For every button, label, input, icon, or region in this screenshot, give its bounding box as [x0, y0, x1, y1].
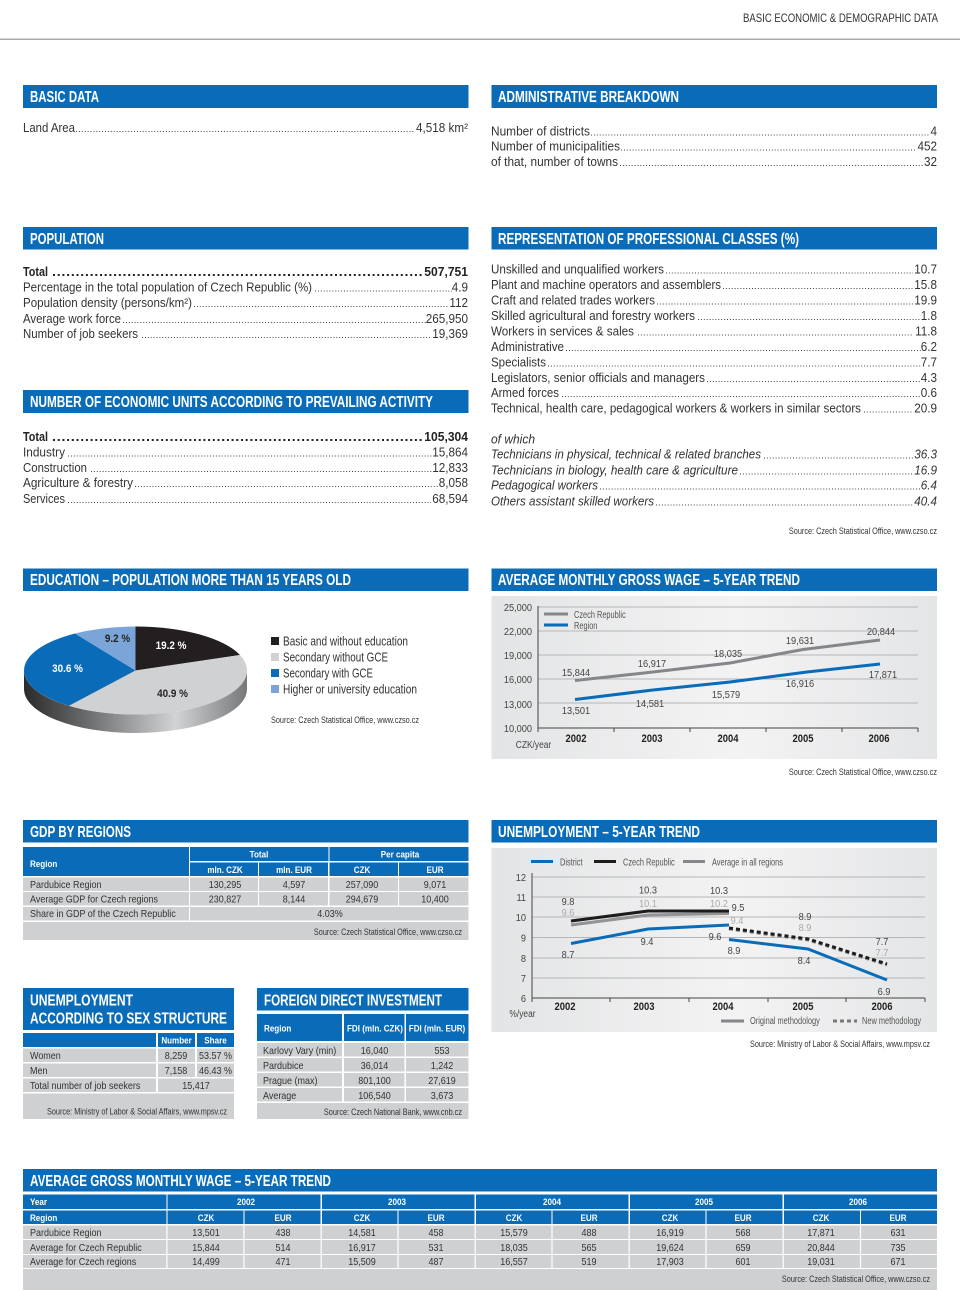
line chart: unemployment: 2002: [555, 1001, 576, 1013]
text block: of which: Pedagogical workers: [491, 478, 598, 492]
table rows: 19,624: [656, 1243, 684, 1254]
table rows: 601: [735, 1257, 751, 1268]
table header: currency: EUR: [428, 1212, 445, 1223]
panel: basic data: Land Area: [23, 120, 76, 135]
panel: foreign direct investment: [257, 988, 468, 1119]
table: fdi: Prague (max): [263, 1076, 317, 1087]
table header: years: [23, 1194, 937, 1209]
line chart: wages: CZK/year: [516, 739, 551, 751]
table header: currency: EUR: [735, 1212, 752, 1223]
panel: economic units: NUMBER OF ECONOMIC UNITS ACCORDING TO PREVAILING ACTIVITY: [30, 394, 433, 411]
table: fdi: Average: [263, 1091, 296, 1102]
table: gdp: 8,144: [283, 894, 305, 906]
table: gdp: 230,827: [209, 894, 241, 906]
line chart: unemployment: %/year: [509, 1008, 536, 1020]
panel: population: 112: [449, 295, 468, 310]
panel: professional classes: Workers in services & sales: [491, 324, 634, 338]
table: gdp: [23, 847, 468, 940]
line chart: unemployment: 2006: [872, 1001, 893, 1013]
panel: professional classes: REPRESENTATION OF PROFESSIONAL CLASSES (%): [498, 231, 799, 248]
table rows: 17,903: [656, 1257, 684, 1268]
panel: administrative breakdown: 4: [931, 124, 937, 139]
table header: currency: [23, 1210, 937, 1224]
panel: professional classes: Administrative: [491, 339, 564, 354]
line chart: wages: 18,035: [714, 649, 743, 660]
table rows: 15,844: [192, 1243, 220, 1254]
panel: unemployment trend: UNEMPLOYMENT – 5-YEAR TREND: [498, 824, 700, 841]
table rows: 568: [735, 1228, 751, 1239]
table rows: 438: [275, 1228, 291, 1239]
table header: currency: EUR: [890, 1212, 907, 1223]
table: fdi: 106,540: [358, 1091, 391, 1102]
table: fdi: Pardubice: [263, 1061, 303, 1072]
table rows: 565: [581, 1243, 597, 1254]
text block: of which: 40.4: [914, 494, 937, 509]
table rows: Average for Czech regions: [30, 1257, 136, 1268]
table: sex structure: 15,417: [182, 1081, 210, 1092]
line chart: wages: 10,000: [504, 724, 533, 735]
panel: professional classes: 19.9: [914, 293, 937, 308]
table: fdi: 3,673: [431, 1091, 453, 1102]
table rows: 15,509: [348, 1257, 376, 1268]
line chart: wages: 13,000: [504, 700, 533, 711]
pie chart: [24, 626, 247, 733]
line chart: wages: 2006: [869, 733, 890, 745]
table rows: 531: [428, 1243, 444, 1254]
line chart: unemployment: 9.6: [709, 932, 722, 943]
table: gdp: 257,090: [346, 880, 378, 891]
table: sex structure: Men: [30, 1066, 47, 1077]
line chart: unemployment: 9.6: [562, 908, 575, 919]
panel: average gross monthly wage table: [23, 1169, 937, 1290]
table rows: 514: [275, 1243, 291, 1254]
line chart: unemployment: 9.4: [731, 916, 744, 927]
line chart: unemployment: 9.5: [732, 903, 745, 914]
source note: Source: Czech Statistical Office, www.czso.cz: [271, 714, 419, 725]
line chart: unemployment: 11: [516, 893, 527, 904]
panel: professional classes: 6.2: [921, 339, 937, 354]
panel: unemployment by sex: UNEMPLOYMENT: [30, 992, 133, 1010]
line chart: unemployment: 10: [516, 913, 527, 924]
line chart: wages: 14,581: [636, 699, 665, 710]
line chart: unemployment: 7: [521, 974, 526, 985]
table: sex structure: 7,158: [165, 1066, 187, 1077]
panel: population: 265,950: [426, 311, 468, 326]
table: gdp: Region: [30, 858, 57, 869]
line chart: wages: 2003: [642, 733, 663, 745]
table: gdp: Pardubice Region: [30, 880, 101, 891]
panel: wage trend: AVERAGE MONTHLY GROSS WAGE – 5-YEAR TREND: [498, 572, 800, 589]
line chart: unemployment: 7.7: [876, 937, 888, 948]
line chart: wages: 19,631: [786, 636, 815, 647]
panel: professional classes: Specialists: [491, 354, 546, 370]
panel: economic units: 68,594: [432, 491, 468, 506]
line chart: wages: 22,000: [504, 627, 533, 638]
line chart: unemployment: Average in all regions: [712, 856, 783, 868]
pie legend: Secondary without GCE: [283, 650, 388, 664]
table header: currency: CZK: [354, 1212, 371, 1223]
table: sex structure: 53.57 %: [199, 1051, 233, 1062]
panel: professional classes: 10.7: [914, 262, 937, 277]
table rows: 17,871: [807, 1228, 835, 1239]
line chart: unemployment: 2004: [713, 1001, 734, 1013]
line chart: unemployment: District: [560, 856, 583, 868]
table: fdi: Source: Czech National Bank, www.cnb.cz: [324, 1106, 462, 1117]
panel: administrative breakdown: Number of districts: [491, 124, 590, 138]
source note: Source: Ministry of Labor & Social Affairs, www.mpsv.cz: [750, 1038, 930, 1049]
text block: of which: of which: [491, 432, 535, 446]
panel: professional classes: Technical, health care, pedagogical workers & workers in similar sectors: [491, 400, 861, 416]
table: fdi: 553: [434, 1046, 450, 1057]
panel: foreign direct investment: FOREIGN DIRECT INVESTMENT: [264, 992, 442, 1010]
table: gdp: 10,400: [421, 894, 449, 906]
line chart: unemployment: Original methodology: [750, 1015, 820, 1026]
table rows: 735: [890, 1243, 906, 1254]
line chart: unemployment: 7.7: [876, 948, 888, 959]
table: gdp: 9,071: [424, 880, 446, 891]
line chart: wages: 2004: [718, 733, 739, 745]
table header: currency: EUR: [581, 1212, 598, 1223]
table: fdi: Region: [264, 1023, 291, 1034]
panel: professional classes: 15.8: [914, 277, 937, 292]
panel: administrative breakdown: 452: [918, 139, 937, 154]
panel: professional classes: Unskilled and unqualified workers: [491, 262, 664, 276]
line chart: unemployment: 9.4: [641, 937, 654, 948]
table rows: 671: [890, 1257, 906, 1268]
table rows: 471: [275, 1257, 291, 1268]
panel: economic units: 12,833: [432, 460, 468, 475]
line chart: unemployment: 2003: [634, 1001, 655, 1013]
table rows: 16,557: [500, 1257, 528, 1268]
table header: years: 2006: [849, 1196, 867, 1207]
line chart: wages: 16,000: [504, 675, 533, 686]
panel: administrative breakdown: 32: [924, 154, 937, 169]
table: fdi: 16,040: [361, 1046, 388, 1057]
table: sex structure: Number: [161, 1035, 192, 1046]
table: gdp: CZK: [354, 864, 371, 875]
line chart: unemployment: 10.3: [639, 885, 657, 897]
panel: economic units: [23, 390, 468, 506]
table rows: Pardubice Region: [30, 1228, 101, 1239]
panel: education: [23, 568, 468, 733]
table rows: 19,031: [807, 1257, 835, 1268]
line chart: unemployment: 8: [521, 954, 527, 965]
panel: gdp by regions: [23, 820, 468, 940]
panel: professional classes: 0.6: [921, 385, 937, 400]
table: gdp: mln. EUR: [276, 864, 313, 875]
panel: professional classes: Legislators, senior officials and managers: [491, 370, 705, 385]
panel: professional classes: 7.7: [921, 355, 937, 370]
table header: currency: Region: [30, 1212, 57, 1223]
panel: population: [23, 227, 468, 341]
panel: administrative breakdown: ADMINISTRATIVE BREAKDOWN: [498, 89, 679, 106]
table: fdi: [257, 1014, 468, 1119]
line chart: wages: 2002: [566, 733, 587, 745]
line chart: wages: Czech Republic: [574, 609, 626, 620]
table rows: 488: [581, 1228, 597, 1239]
table: fdi: 1,242: [431, 1061, 453, 1072]
table rows: Average for Czech Republic: [30, 1243, 142, 1254]
panel: economic units: Agriculture & forestry: [23, 475, 133, 490]
table: gdp: Per capita: [381, 849, 419, 860]
panel: professional classes: Plant and machine operators and assemblers: [491, 277, 721, 292]
panel: professional classes: Skilled agricultural and forestry workers: [491, 308, 695, 323]
pie chart: 19.2 %: [156, 641, 187, 652]
table: gdp: Share in GDP of the Czech Republic: [30, 909, 176, 920]
line chart: unemployment: 2005: [793, 1001, 814, 1013]
panel: economic units: Industry: [23, 444, 65, 460]
line chart: unemployment: 9: [521, 933, 527, 945]
table rows: 458: [428, 1228, 444, 1239]
line chart: wages: 15,844: [562, 668, 591, 679]
text block: of which: Others assistant skilled workers: [491, 494, 654, 508]
panel: basic data: 4,518 km²: [416, 120, 468, 135]
table rows: 16,919: [656, 1228, 684, 1239]
line chart: wages: 25,000: [504, 603, 533, 614]
table header: years: 2003: [388, 1196, 406, 1207]
panel: administrative breakdown: [491, 85, 937, 169]
panel: population: Total: [23, 264, 48, 279]
table rows: 14,581: [348, 1228, 376, 1239]
line chart: unemployment: New methodology: [862, 1015, 922, 1026]
pie legend: Secondary with GCE: [283, 666, 373, 680]
table header: currency: CZK: [506, 1212, 523, 1223]
table rows: 16,917: [348, 1243, 376, 1254]
line chart: wages: 16,916: [786, 679, 815, 690]
table header: currency: CZK: [198, 1212, 215, 1223]
panel: unemployment trend: [492, 820, 937, 1049]
line chart: unemployment: 12: [516, 873, 526, 884]
table: sex structure: Women: [30, 1051, 61, 1062]
table rows: 18,035: [500, 1243, 528, 1254]
table rows: 631: [890, 1228, 906, 1239]
line chart: wages: 20,844: [867, 627, 896, 638]
line chart: unemployment: 8.9: [799, 923, 812, 934]
line chart: unemployment: 6.9: [878, 987, 891, 998]
pie legend: [271, 634, 417, 696]
panel: average gross monthly wage table: AVERAGE GROSS MONTHLY WAGE – 5-YEAR TREND: [30, 1173, 331, 1190]
line chart: unemployment: 8.4: [798, 956, 811, 967]
line chart: unemployment: 10.2: [710, 899, 728, 910]
text block: of which: Technicians in physical, technical & related branches: [491, 446, 761, 462]
text block: of which: 16.9: [914, 463, 937, 478]
text block: of which: 36.3: [914, 447, 937, 462]
line chart: wages: 2005: [793, 733, 814, 745]
table rows: 659: [735, 1243, 751, 1254]
panel: economic units: Construction: [23, 460, 87, 475]
panel: economic units: 15,864: [432, 445, 468, 460]
line chart: wages: Region: [574, 620, 598, 631]
table: fdi: 27,619: [428, 1076, 456, 1087]
table rows: [23, 1225, 937, 1290]
line chart: wages: 15,579: [712, 690, 741, 701]
panel: education: EDUCATION – POPULATION MORE THAN 15 YEARS OLD: [30, 572, 351, 589]
table rows: 14,499: [192, 1257, 220, 1268]
pie legend: Basic and without education: [283, 634, 408, 648]
table: gdp: 294,679: [346, 894, 378, 906]
panel: professional classes: 20.9: [914, 401, 937, 416]
panel: professional classes: 4.3: [921, 370, 937, 385]
panel: professional classes: Armed forces: [491, 385, 559, 400]
text block: of which: Technicians in biology, health care & agriculture: [491, 462, 738, 478]
panel: administrative breakdown: of that, number of towns: [491, 154, 618, 169]
table: sex structure: Source: Ministry of Labor & Social Affairs, www.mpsv.cz: [47, 1106, 227, 1117]
pie chart: 40.9 %: [157, 689, 189, 700]
line chart: unemployment: 9.8: [562, 897, 575, 908]
source note: Source: Czech Statistical Office, www.czso.cz: [789, 766, 937, 777]
panel: economic units: Total: [23, 429, 48, 444]
line chart: wages: 13,501: [562, 706, 591, 717]
table: gdp: Source: Czech Statistical Office, www.czso.cz: [314, 926, 462, 937]
panel: unemployment by sex: ACCORDING TO SEX STRUCTURE: [30, 1010, 227, 1028]
table rows: 13,501: [192, 1228, 220, 1239]
line chart: unemployment: 8.7: [562, 950, 574, 961]
panel: basic data: BASIC DATA: [30, 89, 99, 106]
line chart: unemployment: 6: [521, 994, 527, 1005]
table: fdi: 36,014: [361, 1061, 388, 1072]
line chart: wages: 17,871: [869, 670, 898, 681]
table header: years: Year: [30, 1196, 48, 1207]
line chart: wages: 16,917: [638, 659, 666, 670]
panel: population: Percentage in the total population of Czech Republic (%): [23, 280, 312, 294]
pie chart: 30.6 %: [52, 664, 84, 675]
table: fdi: FDI (mln. EUR): [409, 1023, 465, 1034]
panel: administrative breakdown: Number of municipalities: [491, 138, 620, 154]
line chart: unemployment: [492, 848, 937, 1032]
source note: Source: Czech Statistical Office, www.czso.cz: [789, 525, 937, 536]
table: sex structure: [23, 1033, 234, 1119]
table: gdp: Total: [250, 849, 268, 860]
table rows: Source: Czech Statistical Office, www.czso.cz: [782, 1273, 930, 1284]
panel: economic units: 105,304: [424, 430, 468, 444]
panel: economic units: Services: [23, 491, 65, 506]
table: gdp: 130,295: [209, 880, 241, 891]
panel: economic units: 8,058: [439, 475, 468, 490]
line chart: unemployment: 10.3: [710, 886, 728, 897]
table header: years: 2004: [543, 1196, 561, 1207]
table rows: 487: [428, 1257, 444, 1268]
table: sex structure: Total number of job seekers: [30, 1081, 141, 1092]
line chart: unemployment: Czech Republic: [623, 856, 675, 868]
panel: professional classes: 1.8: [921, 308, 937, 323]
pie chart: 9.2 %: [105, 634, 131, 645]
table header: years: 2002: [237, 1196, 255, 1207]
table header: currency: CZK: [813, 1212, 830, 1223]
panel: population: POPULATION: [30, 231, 104, 248]
table: sex structure: Share: [204, 1035, 227, 1046]
panel: population: Population density (persons/km²): [23, 295, 192, 310]
table: sex structure: 46.43 %: [199, 1066, 233, 1077]
table: gdp: 4.03%: [317, 909, 343, 920]
table: fdi: FDI (mln. CZK): [347, 1023, 403, 1034]
panel: population: 4.9: [452, 280, 468, 295]
table: fdi: 801,100: [358, 1076, 391, 1087]
table: gdp: mln. CZK: [207, 864, 243, 875]
panel: professional classes: [491, 227, 937, 416]
table header: years: 2005: [695, 1196, 713, 1207]
table: fdi: Karlovy Vary (min): [263, 1046, 336, 1057]
table rows: 519: [581, 1257, 597, 1268]
table: gdp: EUR: [427, 864, 444, 875]
panel: unemployment by sex: [23, 988, 234, 1119]
panel: professional classes: Craft and related trades workers: [491, 292, 655, 308]
panel: population: 19,369: [432, 326, 468, 341]
line chart: wages: [492, 596, 937, 759]
text block: of which: 6.4: [921, 478, 937, 493]
table header: currency: CZK: [662, 1212, 679, 1223]
table: gdp: 4,597: [283, 880, 305, 891]
line chart: unemployment: 8.9: [728, 946, 741, 957]
panel: gdp by regions: GDP BY REGIONS: [30, 824, 131, 841]
pie legend: Higher or university education: [283, 682, 417, 696]
panel: population: Number of job seekers: [23, 326, 138, 341]
table rows: 20,844: [807, 1243, 835, 1254]
panel: basic data: [23, 85, 468, 135]
table rows: 15,579: [500, 1228, 528, 1239]
line chart: unemployment: 10.1: [639, 899, 657, 910]
panel: wage trend: [492, 568, 937, 777]
text block: of which: [491, 432, 937, 509]
line chart: unemployment: 8.9: [799, 912, 812, 923]
panel: population: Average work force: [23, 311, 121, 326]
line chart: wages: 19,000: [504, 651, 533, 662]
table: sex structure: 8,259: [165, 1051, 187, 1062]
panel: population: 507,751: [424, 265, 468, 279]
panel: professional classes: 11.8: [915, 324, 937, 339]
table header: currency: EUR: [275, 1212, 292, 1223]
table: gdp: Average GDP for Czech regions: [30, 894, 158, 906]
